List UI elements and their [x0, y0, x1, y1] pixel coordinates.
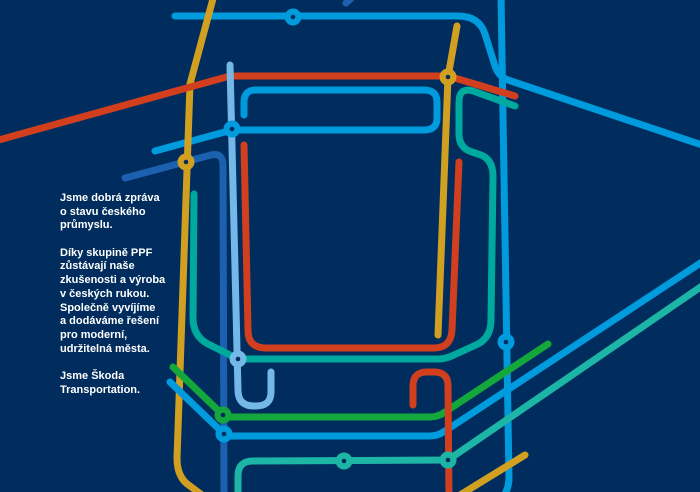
line: left yellow [177, 0, 214, 492]
text block: message: zkušenosti a výroba [60, 274, 165, 286]
text block: message: a dodáváme řešení [60, 315, 159, 327]
text block: message: Díky skupině PPF [60, 247, 152, 259]
line: inner red [244, 145, 459, 348]
line: blue rectangle [155, 90, 437, 151]
line: lower teal [238, 284, 700, 492]
line: dark blue [125, 0, 358, 492]
station: lower teal right [440, 452, 456, 468]
text block: message: udržitelná města. [60, 343, 150, 355]
station: blue junction [224, 120, 240, 138]
line: green [173, 344, 548, 417]
station: green [214, 406, 232, 424]
text block: message: průmyslu. [60, 219, 113, 231]
line: centre yellow [438, 26, 457, 335]
text block: message [60, 192, 166, 396]
station: lower teal left [336, 452, 352, 470]
line: top red [0, 76, 515, 141]
text block: message: v českých rukou. [60, 288, 149, 300]
station: left yellow [178, 154, 194, 170]
line: lower yellow [460, 455, 525, 492]
line: right blue vertical [501, 0, 509, 492]
station: centre yellow [440, 68, 456, 86]
text block: message: Jsme Škoda [60, 370, 124, 382]
station: light blue [230, 350, 246, 368]
station: top blue [284, 8, 302, 26]
line: lower blue [170, 260, 700, 436]
text block: message: zůstávají naše [60, 260, 135, 272]
text block: message: Jsme dobrá zpráva [60, 192, 160, 204]
line: teal inner loop [193, 90, 515, 359]
text block: message: pro moderní, [60, 329, 127, 341]
text block: message: o stavu českého [60, 206, 146, 218]
station: right blue [498, 334, 514, 350]
text block: message: Transportation. [60, 384, 140, 396]
line: top blue [175, 16, 700, 146]
line: red hook [413, 372, 449, 492]
text block: message: Společně vyvíjíme [60, 302, 155, 314]
line: light blue [230, 65, 271, 406]
station: lower blue [216, 426, 232, 442]
